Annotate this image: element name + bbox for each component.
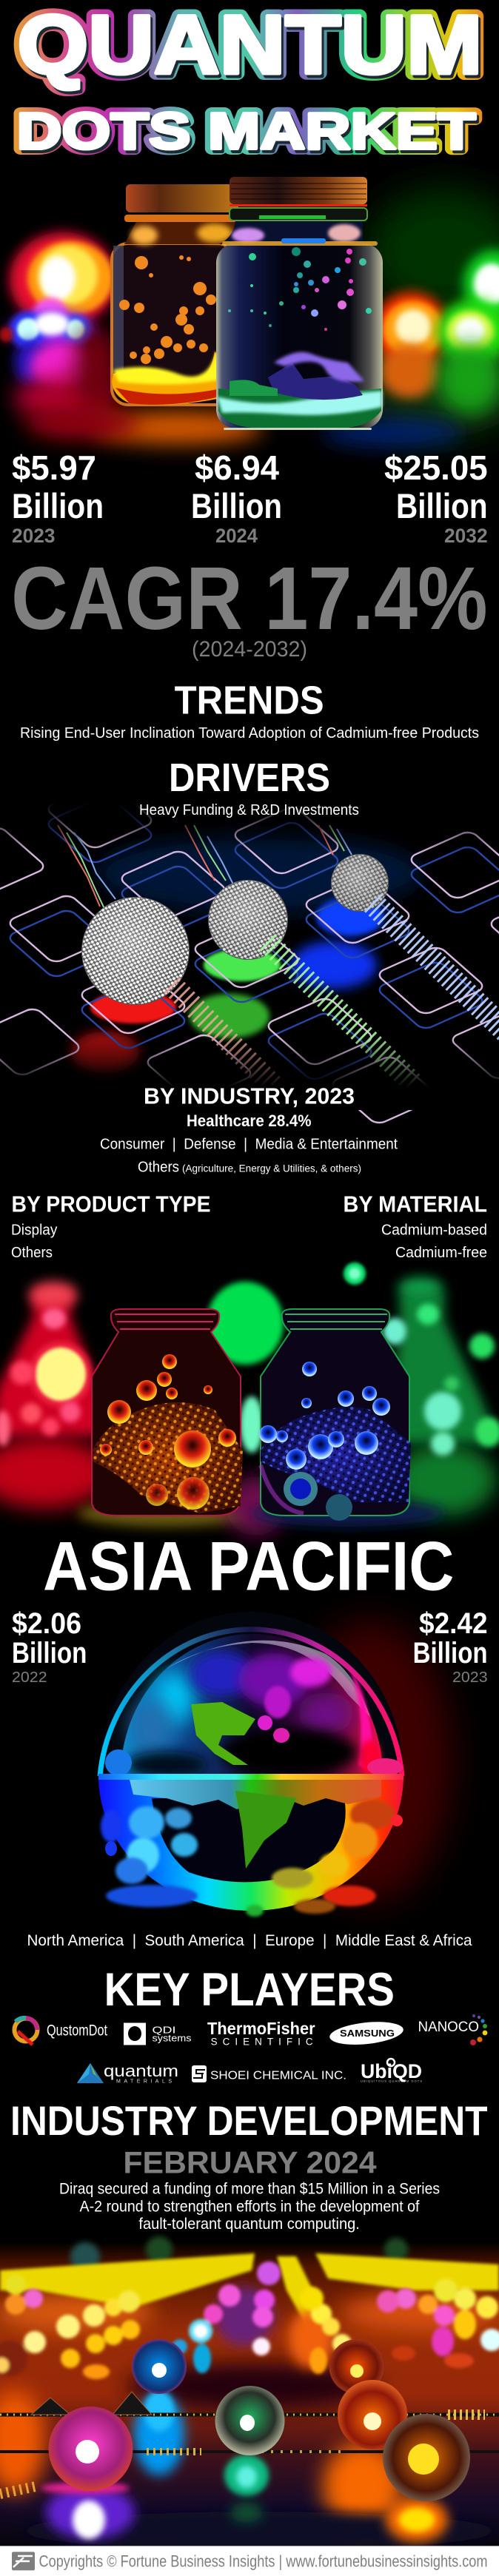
image: glowing quantum dot jars (0, 177, 499, 446)
bokeh dots (0, 2261, 499, 2379)
fringe under water line (130, 1780, 381, 1809)
sphere: large (81, 897, 190, 1005)
title line 1: QUANTUM (18, 0, 483, 91)
title (16, 0, 483, 160)
title line 1: outline: QUANTUM (18, 0, 483, 91)
stat 2022: Billion (12, 1637, 87, 1669)
inner sphere (121, 1634, 383, 1776)
company logos (15, 2014, 487, 2084)
logo: QDI systems: QDI (153, 2025, 176, 2036)
floor glow (25, 407, 463, 446)
by industry: Others (138, 1158, 179, 1175)
stat 2024: 2024 (215, 525, 258, 547)
output wave beams (172, 903, 499, 1086)
footer bar (0, 2546, 499, 2576)
by material (344, 1192, 487, 1261)
footer logo (12, 2552, 35, 2570)
stat 2023 regional (413, 1607, 488, 1686)
logo: Thermo Fisher Scientific: ThermoFisher (207, 2019, 315, 2038)
stat 2024: Billion (191, 486, 282, 525)
by industry: BY INDUSTRY, 2023 (144, 1083, 355, 1109)
thin input waves (58, 825, 352, 910)
logo: UbiQD: UbiQD (361, 2060, 422, 2082)
by industry: (Agriculture, Energy & Utilities, & others) (182, 1163, 361, 1174)
red halo (289, 1621, 452, 1902)
by material: Cadmium-free (395, 1244, 487, 1261)
magenta blobs (258, 1686, 291, 1743)
stat 2023 regional: 2023 (452, 1669, 488, 1686)
stat 2022: 2022 (12, 1669, 47, 1686)
back jar (112, 184, 238, 405)
stat 2032: 2032 (444, 525, 488, 547)
stat 2023 regional: $2.42 (419, 1607, 488, 1640)
logo: QustomDot: QustomDot (47, 2022, 107, 2039)
edge clouds (105, 1749, 403, 1776)
stat 2032 (384, 448, 488, 547)
logo: Thermo Fisher Scientific (207, 2019, 315, 2048)
logo: Quantum Materials (77, 2062, 178, 2084)
by material: Cadmium-based (381, 1222, 487, 1239)
stat 2023 (12, 448, 104, 547)
logo: Quantum Materials: MATERIALS (116, 2079, 172, 2084)
region heading: ASIA PACIFIC (43, 1527, 455, 1604)
floor and haze (0, 2236, 499, 2550)
by product type: Display (11, 1222, 58, 1239)
by industry (100, 1083, 398, 1175)
image: quantum bead circuit with bokeh lights (0, 2236, 499, 2550)
South America continent (235, 1791, 296, 1869)
logo: QDI systems (124, 2023, 192, 2045)
yellow bokeh bands (0, 2253, 499, 2324)
logo: QustomDot (15, 2018, 107, 2045)
market size stats (12, 448, 488, 547)
logo: Thermo Fisher Scientific: SCIENTIFIC (211, 2037, 313, 2048)
trends: TRENDS (175, 679, 324, 723)
other regions: North America | South America | Europe | Middle East & Africa (27, 1932, 472, 1949)
stat 2024 (191, 448, 282, 547)
image: red and blue bubbling jars (0, 1262, 499, 1536)
industry development: fault-tolerant quantum computing. (138, 2215, 360, 2233)
drivers: Heavy Funding & R&D Investments (139, 801, 359, 818)
right bokeh lights (363, 189, 499, 437)
by industry: Consumer | Defense | Media & Entertainment (100, 1136, 398, 1153)
title line 2: DOTS MARKET (16, 102, 475, 160)
globe lower hemisphere (98, 1776, 403, 1911)
image: rainbow quantum globe (98, 1612, 452, 1917)
North America continent (191, 1702, 255, 1765)
industry development: Diraq secured a funding of more than $15 Million in a Series (59, 2179, 440, 2197)
sphere: medium (208, 880, 288, 960)
logo: Nanoco: NANOCO (418, 2019, 479, 2035)
sphere: small (331, 854, 389, 912)
title line 2: outline: DOTS MARKET (16, 102, 475, 160)
globe upper shell (98, 1612, 403, 1776)
industry development: A-2 round to strengthen efforts in the development of (80, 2198, 420, 2216)
green flask backdrop (370, 1277, 499, 1516)
red flask backdrop (0, 1282, 111, 1508)
reflections (41, 2390, 448, 2542)
circuit tiles (0, 779, 499, 1126)
stat 2022: $2.06 (12, 1607, 81, 1640)
water surface (98, 1774, 403, 1780)
tile glow (71, 833, 422, 1073)
dark sea (152, 1798, 346, 1882)
table glow (78, 1476, 444, 1536)
industry development: FEBRUARY 2024 (123, 2145, 377, 2179)
right jar (259, 1309, 411, 1521)
logo: Shoei Chemical (192, 2065, 346, 2082)
image fades (0, 740, 499, 1110)
by industry: Healthcare 28.4% (187, 1112, 311, 1130)
by product type: BY PRODUCT TYPE (12, 1192, 210, 1217)
front jar (216, 177, 383, 430)
orange haze under bands (215, 2287, 333, 2368)
stat 2032: $25.05 (384, 448, 488, 487)
drivers (139, 756, 359, 818)
glass spheres (49, 2339, 470, 2501)
logo: Nanoco (418, 2014, 487, 2045)
trends: Rising End-User Inclination Toward Adoption of Cadmium-free Products (20, 724, 479, 741)
logo: QDI systems: systems (153, 2032, 192, 2043)
left jar (92, 1309, 243, 1516)
globe rim (100, 1630, 402, 1776)
logo: Samsung: SAMSUNG (340, 2028, 395, 2039)
logo: Quantum Materials: quantum (104, 2062, 178, 2080)
by product type: Others (11, 1244, 53, 1261)
left bokeh lights (0, 232, 118, 420)
industry development (10, 2098, 488, 2233)
logo: Samsung (329, 2019, 404, 2048)
trends (20, 679, 479, 741)
by material: BY MATERIAL (344, 1192, 487, 1217)
stat 2023: 2023 (12, 525, 55, 547)
stat 2022 (12, 1607, 87, 1686)
stat 2023: $5.97 (12, 448, 96, 487)
bead wires (0, 2392, 499, 2494)
logo: Shoei Chemical: SHOEI CHEMICAL INC. (210, 2069, 346, 2082)
drivers: DRIVERS (169, 756, 330, 800)
floating colored dots (228, 247, 372, 331)
image: quantum dot spheres on circuit tiles (0, 740, 499, 1126)
stat 2024: $6.94 (195, 448, 279, 487)
spill under globe (106, 1885, 376, 1917)
logo: UbiQD: UBIQUITOUS QUANTUM DOTS (361, 2079, 422, 2082)
jar liquid and sediment (217, 352, 382, 430)
by product type (11, 1192, 210, 1261)
stat 2023: Billion (12, 486, 104, 525)
key players heading: KEY PLAYERS (104, 1964, 395, 2016)
CAGR: (2024-2032) (192, 637, 307, 662)
rainbow clouds (101, 1800, 403, 1889)
green sphere backdrop (207, 1262, 366, 1453)
inner sphere lights (126, 1641, 381, 1778)
